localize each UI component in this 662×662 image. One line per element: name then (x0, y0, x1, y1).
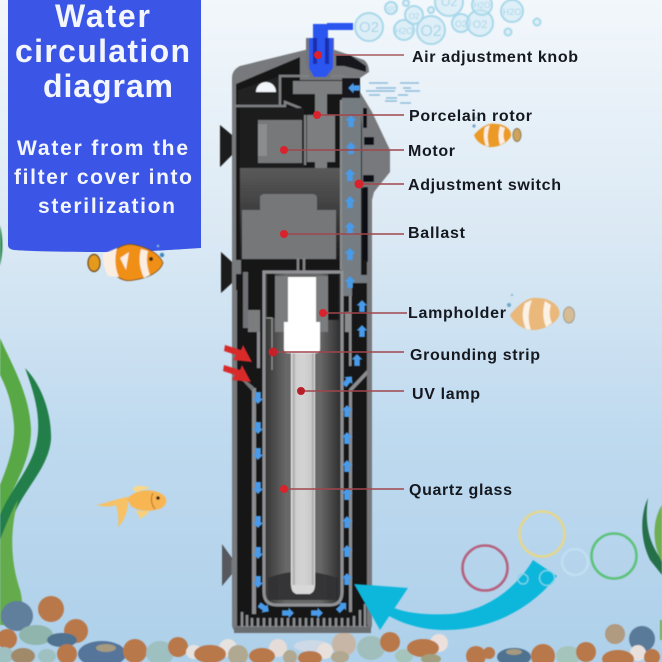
title (15, 0, 190, 104)
oxygen bubbles: O2 (420, 23, 442, 40)
subtitle: filter cover into (14, 166, 192, 189)
subtitle: Water from the (17, 137, 188, 160)
left channel walls (232, 272, 260, 626)
subtitle: sterilization (38, 195, 175, 218)
callout: uv lamp (297, 386, 480, 403)
callout: quartz glass (280, 482, 512, 499)
suction cups (220, 125, 242, 586)
decorative rings (462, 512, 636, 590)
partition (242, 260, 335, 268)
callout: porcelain rotor: Porcelain rotor (409, 108, 532, 125)
subtitle (14, 137, 192, 218)
bottom comb (242, 604, 365, 628)
oxygen bubbles: O2 (359, 19, 379, 36)
oxygen bubbles: H2O (474, 1, 490, 10)
clownfish right lower (507, 294, 574, 330)
filter unit (220, 23, 390, 633)
oxygen bubbles: H2O (503, 7, 521, 17)
callout: adjustment switch: Adjustment switch (408, 177, 561, 194)
callout: air adjustment knob: Air adjustment knob (412, 49, 578, 66)
mounting hole (256, 82, 276, 92)
oxygen bubbles: H2O (395, 26, 413, 36)
ballast chamber (240, 168, 340, 260)
inner dark cavity (236, 57, 368, 626)
callout: lampholder: Lampholder (408, 305, 506, 322)
callout: grounding strip (268, 347, 540, 364)
lower chamber (264, 272, 342, 605)
title banner (8, 0, 201, 252)
right channel walls (345, 262, 372, 625)
outer shell (232, 50, 390, 633)
goldfish (96, 486, 166, 527)
left aquatic plant (0, 225, 51, 625)
top grey wall frame (234, 76, 360, 165)
callout: ballast: Ballast (408, 225, 466, 242)
oxygen bubbles: H2O (385, 7, 397, 13)
water flow arrows (252, 82, 368, 618)
callout: motor (280, 143, 455, 160)
right aquatic plant (642, 498, 662, 640)
right water channel (342, 78, 374, 296)
clownfish right upper (472, 117, 521, 147)
uv lamp (291, 353, 315, 594)
callout: grounding strip: Grounding strip (410, 347, 540, 364)
title: diagram (43, 68, 173, 104)
oxygen bubbles: O2 (473, 19, 487, 31)
title: circulation (15, 33, 190, 69)
oxygen bubbles: O2 (409, 12, 420, 21)
top upper right housing (336, 55, 366, 72)
clownfish under banner (88, 244, 164, 281)
callout: uv lamp: UV lamp (412, 386, 480, 403)
oxygen bubbles: O2 (455, 19, 467, 29)
pebbles (0, 596, 660, 662)
callout: lampholder (319, 305, 506, 322)
cyan return arrow (354, 560, 557, 630)
red inlet arrows (223, 345, 252, 382)
oxygen bubbles (355, 0, 540, 44)
lampholder (275, 276, 328, 353)
motor compartment (240, 108, 304, 168)
callout: quartz glass: Quartz glass (409, 482, 512, 499)
water ripple dashes (366, 83, 420, 103)
callout: porcelain rotor (313, 108, 532, 125)
callout: ballast (280, 225, 466, 242)
top left upper lit wall (238, 76, 280, 106)
air adjustment knob (306, 23, 353, 78)
porcelain rotor (293, 81, 347, 168)
callout: air adjustment knob (314, 49, 578, 66)
callout: motor: Motor (408, 143, 455, 160)
